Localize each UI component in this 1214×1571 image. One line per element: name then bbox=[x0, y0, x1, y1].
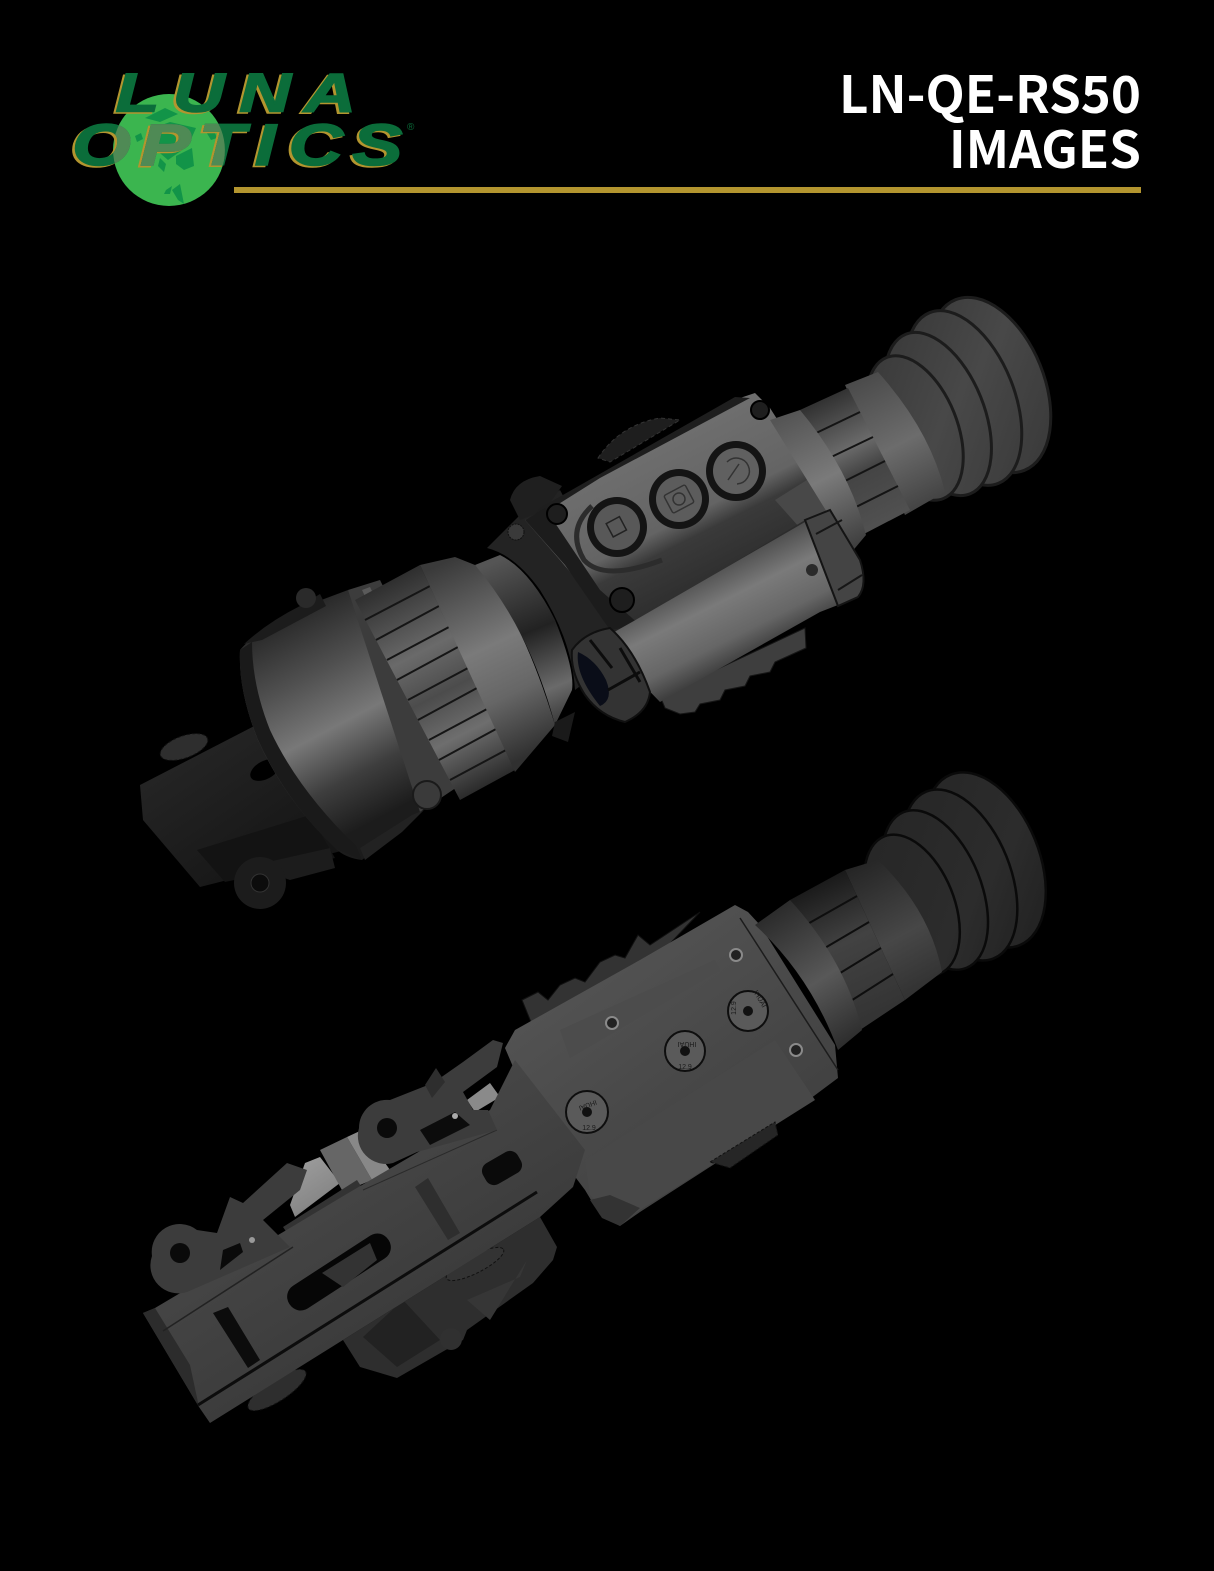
wordmark: LUNA: LUNA bbox=[113, 63, 353, 125]
eyepiece collar bbox=[770, 410, 866, 560]
large screw with marking: IHUAI bbox=[577, 1098, 597, 1111]
eyepiece bbox=[770, 279, 1075, 560]
large screw with marking: 12.9 bbox=[678, 1064, 692, 1071]
small screws bbox=[606, 949, 802, 1056]
large screw with marking bbox=[728, 989, 768, 1031]
title bbox=[839, 54, 1141, 183]
wordmark: OPTICS: OPTICS bbox=[70, 115, 400, 179]
front knob with lens bbox=[572, 628, 650, 722]
lower knob bbox=[242, 1362, 312, 1418]
large screw with marking: IHUAI bbox=[678, 1040, 696, 1047]
eyepiece bbox=[755, 754, 1070, 1050]
wordmark: LUNA: LUNA bbox=[116, 61, 356, 124]
underside clip bbox=[590, 1195, 640, 1226]
wordmark: OPTICS: OPTICS bbox=[72, 113, 403, 178]
dark side housing bbox=[487, 490, 640, 690]
control body bbox=[525, 393, 838, 630]
eyepiece ribbed ring bbox=[800, 388, 910, 535]
ribbed focus ring bbox=[355, 565, 515, 800]
underside dial bbox=[710, 1122, 778, 1168]
tube end ring bbox=[805, 510, 864, 606]
small slot bbox=[479, 1148, 525, 1188]
clamp block bbox=[415, 1178, 460, 1240]
tube behind bracket bbox=[290, 1083, 500, 1217]
large screw with marking: 12.9 bbox=[582, 1125, 596, 1132]
logo: Luna Optics bbox=[70, 61, 415, 206]
button: power bbox=[706, 441, 766, 501]
title: LN-QE-RS50 bbox=[839, 54, 1141, 128]
objective lens housing bbox=[240, 555, 575, 860]
slot bbox=[282, 1229, 396, 1315]
rail bbox=[522, 912, 700, 1032]
top dial bbox=[598, 418, 680, 462]
battery tube bbox=[572, 510, 864, 722]
large screw with marking bbox=[566, 1091, 608, 1133]
button recess bbox=[577, 506, 662, 571]
lever: front bbox=[150, 1163, 307, 1293]
side lever bbox=[510, 476, 562, 520]
eyepiece collar bbox=[755, 900, 862, 1050]
large screw with marking: IHUAI bbox=[752, 989, 767, 1009]
eyecup rings bbox=[845, 754, 1070, 989]
lever: rear bbox=[358, 1040, 503, 1164]
eyepiece tube bbox=[845, 860, 942, 1000]
eyepiece ribbed ring bbox=[790, 870, 905, 1030]
registered mark: ® bbox=[407, 122, 415, 133]
rear hood bbox=[420, 557, 555, 772]
screws bbox=[547, 401, 769, 612]
mounting plate bbox=[140, 722, 345, 909]
button: camera bbox=[649, 469, 709, 529]
button: menu bbox=[587, 497, 647, 557]
rail bbox=[660, 628, 806, 714]
large screw with marking: 12.9 bbox=[731, 1001, 738, 1015]
photo: scope underside view bbox=[143, 754, 1070, 1423]
eyepiece tube bbox=[845, 372, 945, 515]
wordmark: OPTICS bbox=[72, 123, 403, 168]
icon: green globe bbox=[113, 94, 225, 206]
eyecup rings bbox=[848, 279, 1075, 514]
objective housing seen from below bbox=[343, 1217, 557, 1378]
side screw bbox=[508, 524, 524, 540]
clamp block bbox=[213, 1307, 260, 1368]
mounting bracket bbox=[143, 1060, 585, 1423]
gold divider bar bbox=[234, 187, 1141, 193]
title: IMAGES bbox=[949, 109, 1141, 183]
lens cap bbox=[240, 590, 430, 860]
wordmark: OPTICS: OPTICS bbox=[72, 113, 403, 178]
control body underside bbox=[505, 905, 838, 1226]
large screw with marking bbox=[665, 1031, 705, 1071]
photo: scope top view bbox=[140, 279, 1075, 909]
